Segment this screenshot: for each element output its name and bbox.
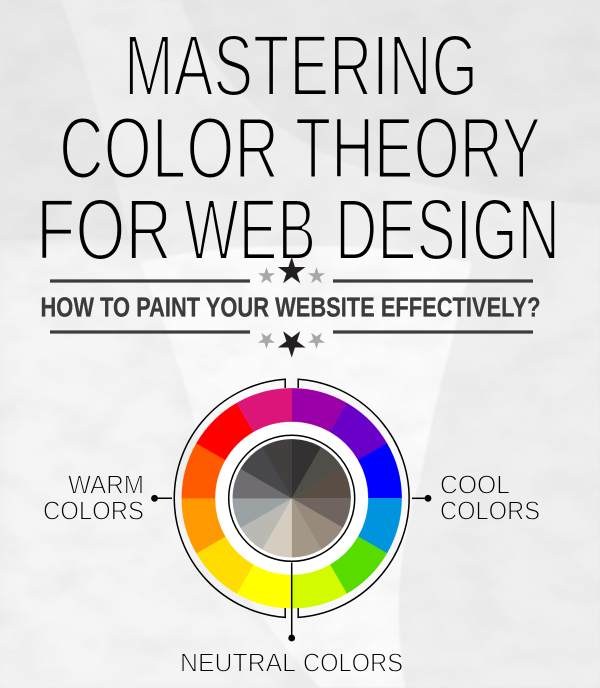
connector: neutral bbox=[288, 562, 295, 641]
connector: cool bbox=[412, 495, 431, 502]
hue ring bbox=[169, 376, 414, 621]
white hub bbox=[214, 420, 370, 576]
title line 2: color: COLOR bbox=[59, 99, 279, 197]
bottom rules bbox=[50, 330, 533, 334]
label: colors bottom: COLORS bbox=[303, 648, 403, 678]
title line 3: web: WEB bbox=[184, 180, 316, 278]
title bbox=[36, 16, 560, 278]
warm colors bracket bbox=[174, 379, 285, 617]
labels bbox=[43, 470, 540, 678]
icon: bottom stars bbox=[258, 331, 325, 358]
label: cool: COOL bbox=[440, 470, 510, 500]
color wheel bbox=[169, 376, 414, 621]
label: colors left: COLORS bbox=[43, 496, 144, 526]
label: warm: WARM bbox=[68, 470, 144, 500]
top rules bbox=[50, 279, 533, 283]
title line 3: for: FOR bbox=[36, 180, 172, 278]
neutral center bbox=[226, 432, 358, 564]
black ring around center bbox=[229, 435, 355, 561]
cool colors bracket bbox=[298, 379, 409, 617]
label: neutral: NEUTRAL bbox=[180, 648, 296, 678]
connector: warm bbox=[151, 495, 172, 502]
icon: top stars bbox=[258, 257, 325, 283]
subtitle with rules and stars bbox=[40, 257, 540, 358]
label: colors right: COLORS bbox=[440, 496, 540, 526]
